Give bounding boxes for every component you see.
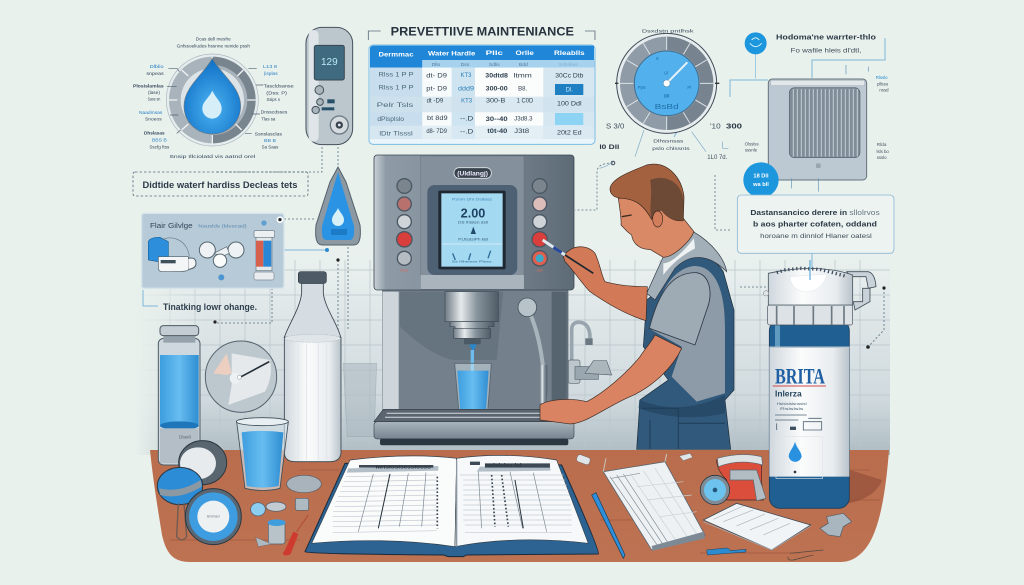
small parts — [251, 454, 591, 555]
callout: blue circle — [743, 162, 779, 198]
notebook — [703, 503, 811, 550]
faucet — [568, 322, 612, 383]
table: J3d8.3 — [514, 116, 533, 122]
brand badge: (Uldlangj) — [457, 170, 488, 177]
control screen: Ss lllhslsss Plsss — [452, 260, 493, 264]
dial labels: (Dss: P) — [266, 91, 288, 96]
left blue water bottle: Dlas8 — [179, 434, 191, 439]
gauge readings: pslo chlssnts — [652, 146, 690, 152]
table: Sdssbss — [559, 62, 578, 68]
table: t0t-40 — [487, 129, 508, 135]
handheld digital tester — [306, 27, 353, 145]
wall tiles — [144, 260, 890, 455]
panel: filter change — [142, 213, 284, 288]
gauge readings: '10 — [710, 123, 721, 130]
filter side labels: Rlcla — [877, 142, 887, 147]
table: KT3 — [460, 73, 472, 79]
table: Water Hardle — [428, 51, 476, 58]
brand label: Hslslslslsnsslsl — [777, 402, 807, 406]
left blue water bottle — [158, 326, 200, 465]
dial labels: Tlas sa — [261, 116, 276, 121]
icon: blue jug and cup — [148, 237, 196, 272]
table: Rlss 1 P P — [378, 86, 414, 92]
forearm and lower hand — [540, 335, 682, 424]
callout: blue circle: 18 Dll — [753, 173, 769, 179]
table: dt -D9 — [427, 98, 444, 104]
filter side labels: nssd — [879, 88, 889, 93]
panel: water hardness dial — [133, 37, 294, 160]
dial labels: Snsip Illciolatd vis aatnd orel — [169, 154, 255, 160]
label connector strokes — [167, 69, 263, 133]
table: Pllc — [486, 50, 503, 57]
hex nut — [820, 513, 852, 537]
glass of water on desk — [236, 418, 288, 490]
lens caps: Bmmsd — [207, 514, 220, 518]
dial labels: Plosislamlas — [133, 83, 164, 88]
table: ltmm — [513, 74, 532, 80]
filter cartridge — [768, 79, 867, 180]
filter side labels: Olsslss — [745, 141, 759, 146]
steam wand — [518, 298, 547, 403]
dial labels: L13 8 — [263, 64, 277, 69]
coffee machine: Sdll — [537, 269, 543, 273]
dial labels: Naadmsas — [139, 110, 163, 115]
filter side labels — [745, 75, 889, 160]
brand label: Rslslsls — [780, 407, 804, 411]
table: --.D — [460, 116, 474, 122]
table: bt 8d9 — [427, 116, 448, 122]
lens caps — [157, 441, 241, 545]
handheld digital tester: 129 — [321, 57, 338, 68]
filter side labels: Rlsslo — [876, 75, 888, 80]
face and neck — [618, 197, 694, 257]
filter side labels: sssnle — [745, 148, 758, 153]
table: Rlss 1 P P — [378, 72, 414, 78]
drip tray — [374, 409, 574, 445]
gauge readings: 1L0 7d. — [707, 155, 728, 161]
coffee machine — [374, 155, 574, 445]
blue driver — [707, 548, 746, 555]
coffee machine: Dsss — [400, 269, 409, 273]
machine head — [374, 155, 574, 290]
gauge: Dll — [664, 94, 669, 99]
dial labels: Dhslasas — [144, 131, 165, 136]
dial labels: Snoeos — [145, 117, 162, 122]
decorative connectors — [143, 38, 886, 349]
dial labels: BBS B — [152, 138, 167, 143]
filter side labels: lsls bo — [876, 149, 889, 154]
filter side labels: pllsso — [877, 82, 889, 87]
dial ring — [166, 54, 258, 146]
small bolt — [679, 453, 693, 461]
milk-white bottle — [284, 272, 377, 462]
icon: red-blue cartridge — [254, 231, 275, 280]
gauge: Pl — [687, 85, 691, 90]
faint glass behind — [343, 363, 377, 437]
dial labels: Dnsscdsses — [261, 109, 288, 114]
table: 100 Ddl — [557, 101, 582, 107]
callout: water hardness test strip title: Didtide waterf hardiss Decleas tets — [142, 180, 298, 191]
gauge: Pp8 — [638, 85, 646, 90]
dial labels: (isplas — [264, 71, 278, 76]
gauge readings: l0 Dll — [599, 144, 620, 151]
dial labels: (lase) — [148, 90, 160, 95]
overalls — [637, 255, 734, 449]
buttons — [397, 179, 547, 266]
desk items left — [157, 418, 591, 555]
table: ddd9 — [458, 86, 475, 92]
panel: pressure gauge and filter — [599, 28, 889, 198]
table: pt- D9 — [426, 86, 448, 92]
table — [369, 45, 595, 144]
control screen: PLflsdslPh Bsl — [458, 237, 488, 242]
table: 30--40 — [486, 117, 508, 123]
dial labels: Dcas dell mesfre — [196, 37, 231, 42]
gauge: 8 — [656, 56, 659, 61]
notepad with grid — [603, 454, 705, 551]
gauge: Ul — [664, 70, 668, 75]
gauge: BsBd — [655, 102, 679, 111]
brand label — [773, 363, 826, 478]
icon: blue drop shield tester — [316, 167, 360, 245]
dial labels: Sa Saas — [262, 144, 279, 149]
machine lower body — [383, 290, 568, 413]
raised arm and hand — [563, 247, 647, 321]
gauge readings: 300 — [726, 123, 742, 130]
table: Pelr Tsls — [377, 103, 413, 109]
table: 30Cc Dtb — [555, 74, 584, 80]
pen pointer — [543, 240, 593, 273]
open logbook: Mrlsloslscsslosss — [376, 464, 432, 469]
dial labels: Ssnslasclas — [255, 131, 283, 136]
caption: tracking low change: Tinatking lowr ohange. — [163, 302, 257, 313]
water drop — [184, 58, 241, 134]
open logbook: Nslslslss lsl — [485, 463, 522, 468]
table: 300-B — [486, 98, 505, 104]
table: Orlle — [515, 50, 534, 57]
table: lDtr Tlsssl — [379, 131, 413, 137]
gauge readings: S 3/0 — [606, 123, 624, 130]
table: --.D — [460, 130, 474, 136]
notebook rules — [703, 506, 811, 550]
gauge readings: Dlhssnsas — [653, 138, 684, 144]
table: 300-00 — [486, 86, 508, 92]
panel heading: Flair Gilvlge — [150, 223, 193, 230]
technician — [540, 164, 734, 449]
table: Dl. — [566, 87, 573, 93]
filter heading: Hodoma'ne warrter-thlo — [776, 35, 876, 42]
dial labels: Gnfssoeliudes hssnne nenide pssh — [177, 43, 250, 48]
title: PREVETTIIVE MAINTENIANCE — [391, 25, 574, 39]
gauge — [615, 28, 719, 133]
desk items right — [592, 453, 852, 560]
table: KT3 — [461, 98, 473, 104]
panel: filter change: Nsuslds (ldescad) — [198, 224, 247, 230]
brand label: Inlerza — [775, 390, 802, 399]
table: Bdd — [519, 62, 528, 68]
control screen: 2.00 — [461, 206, 485, 220]
gauge readings — [599, 123, 742, 161]
panel: pressure gauge and filter: Fo wafile hleis dl'dtl, — [791, 47, 861, 54]
glass of water — [455, 363, 491, 418]
brew group — [445, 292, 498, 372]
gauge: Dsxdstn pntlhsk — [642, 28, 694, 34]
hair — [610, 164, 684, 221]
icon: valve rings — [199, 242, 244, 267]
dial labels — [133, 37, 294, 160]
table: Dllo — [432, 62, 441, 68]
callout: descaling note: Dastansancico derere in sllolrvos — [750, 210, 880, 217]
table: 1 C0D — [517, 98, 534, 104]
table: Dermmac — [378, 52, 414, 59]
paper clip — [788, 550, 823, 560]
callout: descaling note: horoane m dinnlof Hlaner oatesl — [760, 234, 872, 240]
counter — [150, 450, 889, 562]
control screen — [441, 193, 503, 267]
callout: blue circle: wa bll — [752, 182, 769, 188]
brand badge — [454, 168, 491, 178]
icon: blue info circle — [745, 32, 767, 54]
infographic canvas — [132, 26, 894, 562]
dial labels: Sase sn — [148, 96, 161, 101]
Brita filter jug — [763, 260, 876, 508]
dial labels: Sscfg ftss — [149, 144, 170, 149]
analog dial — [205, 341, 277, 412]
pen — [592, 493, 625, 558]
page tables — [347, 466, 551, 473]
table: dt- D9 — [426, 74, 448, 80]
panel: preventive maintenance table — [368, 25, 595, 144]
table: J3t8 — [514, 129, 530, 135]
callout: descaling note: b aos pharter cofaten, oddand — [753, 221, 877, 228]
control screen: DS lhtslsn dsll — [458, 219, 488, 224]
table: 20t2 Ed — [557, 130, 582, 136]
dial labels: Ssips n — [267, 97, 280, 102]
table: dPlsplslo — [377, 117, 405, 123]
table: Sdlis — [489, 62, 500, 68]
control screen: Psnm Dhl Dsllass — [452, 198, 492, 202]
brand label: BRITA — [775, 363, 825, 388]
callout: water hardness test strip title — [133, 172, 308, 196]
red tool with gauge — [700, 455, 766, 505]
callout: descaling note — [737, 195, 894, 253]
table: d8- 7D9 — [426, 129, 448, 135]
filter side labels: ssslo — [877, 155, 887, 160]
table: B8. — [518, 86, 527, 92]
table: Dss — [461, 62, 470, 68]
table: 30dtd8 — [485, 74, 509, 80]
shirt — [647, 232, 727, 402]
dial labels: Tascldsanse — [264, 83, 294, 88]
table: Rleablls — [554, 50, 585, 57]
open logbook — [305, 455, 598, 557]
dial labels: Dlblio — [150, 64, 164, 69]
dial labels: BB B — [264, 138, 276, 143]
dial labels: snpeas — [146, 71, 164, 76]
